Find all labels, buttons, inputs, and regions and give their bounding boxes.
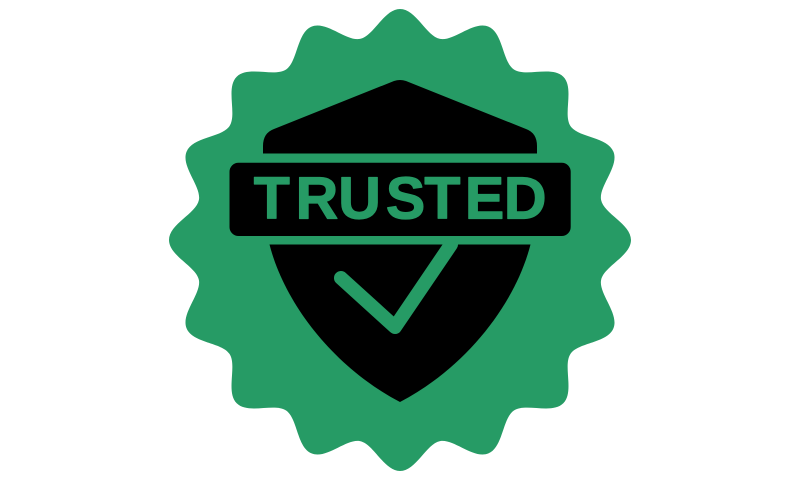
- banner: [230, 163, 571, 236]
- icon: check mark: [341, 244, 451, 327]
- shield bottom: [270, 244, 530, 402]
- banner label: TRUSTED: [254, 166, 547, 232]
- scalloped green seal: [169, 9, 631, 471]
- shield top: [263, 80, 537, 154]
